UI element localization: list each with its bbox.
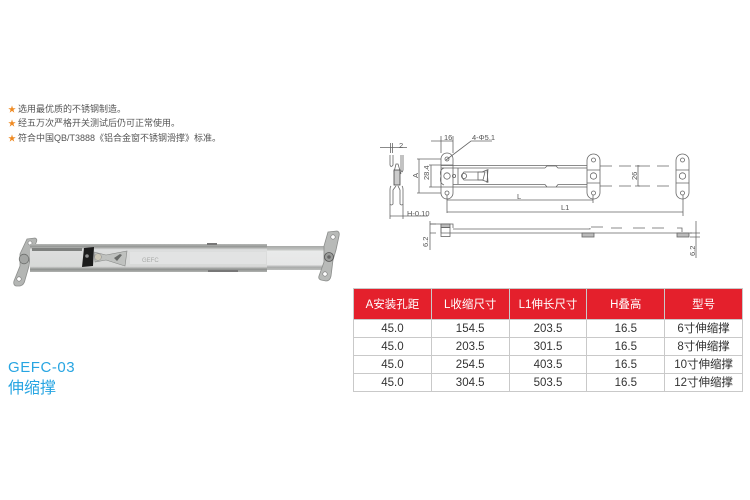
specification table: 304.5 bbox=[456, 376, 485, 388]
dimension labels: 6.2 bbox=[688, 246, 697, 256]
dashed extension lines bbox=[600, 166, 674, 186]
product code heading: GEFC-03 bbox=[8, 359, 75, 376]
outer rail bbox=[30, 244, 267, 272]
dimension labels: 26 bbox=[630, 172, 639, 180]
first bracket bbox=[440, 153, 453, 199]
dimension labels: L1 bbox=[561, 203, 569, 212]
specification table: 503.5 bbox=[534, 376, 562, 388]
specification table: 301.5 bbox=[534, 340, 562, 352]
dimension labels: A bbox=[411, 173, 420, 178]
inner extending rail bbox=[262, 246, 326, 270]
specification table: A安装孔距 bbox=[366, 299, 419, 311]
left pivot bbox=[19, 254, 29, 264]
rails bbox=[441, 166, 587, 187]
side view bbox=[380, 143, 428, 219]
specification table: 254.5 bbox=[456, 358, 485, 370]
dimension labels: 2 bbox=[399, 141, 403, 150]
feature list: 符合中国QB/T3888《铝合金窗不锈钢滑撑》标准。 bbox=[18, 132, 221, 142]
dimension labels: 4-Φ5.1 bbox=[472, 133, 495, 142]
specification table: 12寸伸缩撑 bbox=[674, 376, 733, 388]
right bracket bbox=[319, 231, 339, 281]
specification table: 154.5 bbox=[456, 322, 485, 334]
feature list: ★ bbox=[8, 105, 16, 114]
specification table: 型号 bbox=[692, 299, 715, 311]
specification table bbox=[353, 288, 743, 392]
specification table: L1伸长尺寸 bbox=[519, 299, 577, 311]
black slider bbox=[82, 247, 94, 267]
product name heading: 伸缩撑 bbox=[8, 380, 56, 397]
feature list: 经五万次严格开关测试后仍可正常使用。 bbox=[18, 118, 180, 128]
dimension labels: 16 bbox=[444, 133, 452, 142]
specification table: 403.5 bbox=[534, 358, 562, 370]
dimension labels: 28.4 bbox=[422, 165, 431, 180]
specification table: 10寸伸缩撑 bbox=[674, 358, 733, 370]
right bracket bbox=[676, 154, 689, 199]
specification table: 45.0 bbox=[381, 358, 404, 370]
left bracket bbox=[14, 238, 37, 286]
specification table: 8寸伸缩撑 bbox=[677, 340, 730, 352]
specification table: 45.0 bbox=[381, 340, 404, 352]
dimension labels: L bbox=[517, 192, 521, 201]
specification table: 16.5 bbox=[615, 376, 637, 388]
specification table: 16.5 bbox=[615, 340, 637, 352]
lower side view bbox=[430, 221, 700, 258]
dimension labels: 6.2 bbox=[421, 237, 430, 247]
specification table: 45.0 bbox=[381, 376, 404, 388]
dimension labels: H-0.10 bbox=[407, 209, 430, 218]
dimension lines bbox=[417, 136, 683, 216]
feature list bbox=[8, 104, 221, 143]
dimension labels bbox=[399, 133, 697, 256]
specification table: 203.5 bbox=[534, 322, 562, 334]
logo mark: GEFC bbox=[142, 258, 159, 264]
specification table: 16.5 bbox=[615, 322, 637, 334]
specification table: H叠高 bbox=[610, 299, 641, 311]
specification table: 16.5 bbox=[615, 358, 637, 370]
middle bracket bbox=[587, 154, 600, 199]
feature list: 选用最优质的不锈钢制造。 bbox=[18, 104, 126, 114]
feature list: ★ bbox=[8, 119, 16, 128]
specification table: 203.5 bbox=[456, 340, 485, 352]
feature list: ★ bbox=[8, 134, 16, 142]
specification table: 45.0 bbox=[381, 322, 404, 334]
specification table: L收缩尺寸 bbox=[444, 299, 496, 311]
specification table: 6寸伸缩撑 bbox=[677, 322, 730, 334]
slider plate bbox=[94, 251, 127, 266]
